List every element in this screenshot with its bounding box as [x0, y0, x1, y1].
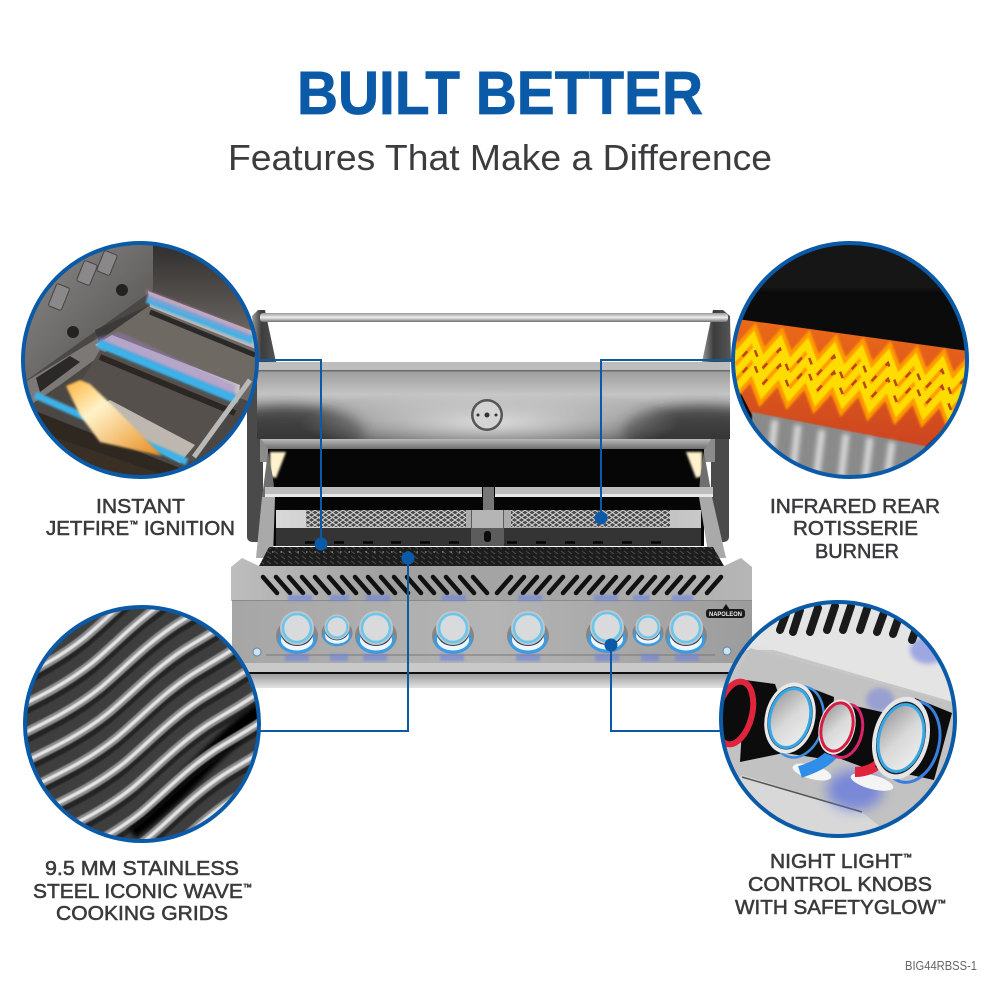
- lid side frames: [247, 310, 731, 542]
- warming rack: [265, 487, 713, 511]
- label: control knobs: ™: [937, 898, 946, 908]
- vent slots: [263, 577, 721, 593]
- lid interior: [257, 362, 730, 439]
- lid lip: [261, 439, 711, 449]
- knob 1: [276, 611, 318, 654]
- model number: BIG44RBSS-1: [905, 959, 977, 973]
- circle photo: wave cooking grids: [23, 605, 261, 843]
- label: control knobs: WITH SAFETYGLOW: [735, 896, 935, 919]
- thermometer: [471, 399, 503, 431]
- lid handle: [260, 313, 728, 322]
- label: control knobs: ™: [903, 852, 912, 862]
- callout dots: [314, 512, 618, 652]
- label: control knobs: NIGHT LIGHT: [770, 850, 899, 873]
- label: jetfire ignition: [46, 495, 235, 540]
- label: control knobs: CONTROL KNOBS: [748, 873, 932, 896]
- circle photo: night light knobs: [711, 598, 960, 843]
- side arms: [256, 452, 726, 558]
- callout line: grids: [255, 558, 408, 731]
- knob 6: [586, 610, 628, 653]
- callout line: infrared: [601, 360, 735, 518]
- rear panel: [276, 510, 701, 546]
- cooking grid: [259, 547, 724, 566]
- label: cooking grids: [33, 857, 252, 925]
- label: cooking grids: STEEL ICONIC WAVE: [33, 880, 238, 903]
- napoleon badge: [706, 604, 745, 618]
- title: BUILT BETTER: [297, 59, 703, 127]
- front trim strips: [236, 663, 748, 688]
- control panel: [232, 600, 752, 663]
- callout line: knobs: [611, 645, 725, 731]
- knob 5: [507, 611, 549, 654]
- blue glow: [285, 595, 699, 661]
- label: infrared burner: INFRARED REAR: [770, 495, 940, 518]
- knob 3: [355, 611, 397, 654]
- knob 4: [432, 611, 474, 654]
- firebox interior: [268, 449, 704, 546]
- label: cooking grids: COOKING GRIDS: [56, 902, 228, 925]
- napoleon badge: NAPOLEON: [709, 611, 742, 618]
- subtitle: Features That Make a Difference: [228, 137, 772, 178]
- circle photo: jetfire burners: [20, 240, 260, 490]
- label: jetfire ignition: ™: [129, 519, 138, 529]
- label: infrared burner: BURNER: [815, 540, 899, 563]
- knob 7: [632, 614, 664, 646]
- label: cooking grids: ™: [243, 882, 252, 892]
- knob 8: [665, 611, 707, 654]
- label: jetfire ignition: JETFIRE: [46, 517, 129, 540]
- label: infrared burner: [770, 495, 940, 563]
- rear burner mesh: [306, 510, 670, 527]
- callout line: jetfire: [255, 360, 321, 543]
- screws: [253, 647, 731, 656]
- label: jetfire ignition: INSTANT: [96, 495, 185, 518]
- body upper: [231, 558, 752, 601]
- lights: [270, 452, 702, 478]
- circle photo: infrared burner: [731, 241, 969, 479]
- label: infrared burner: ROTISSERIE: [793, 517, 918, 540]
- knob 2: [321, 614, 353, 646]
- label: control knobs: [735, 850, 946, 919]
- label: jetfire ignition: IGNITION: [138, 517, 235, 540]
- label: cooking grids: 9.5 MM STAINLESS: [45, 857, 239, 880]
- grill illustration: [205, 310, 782, 688]
